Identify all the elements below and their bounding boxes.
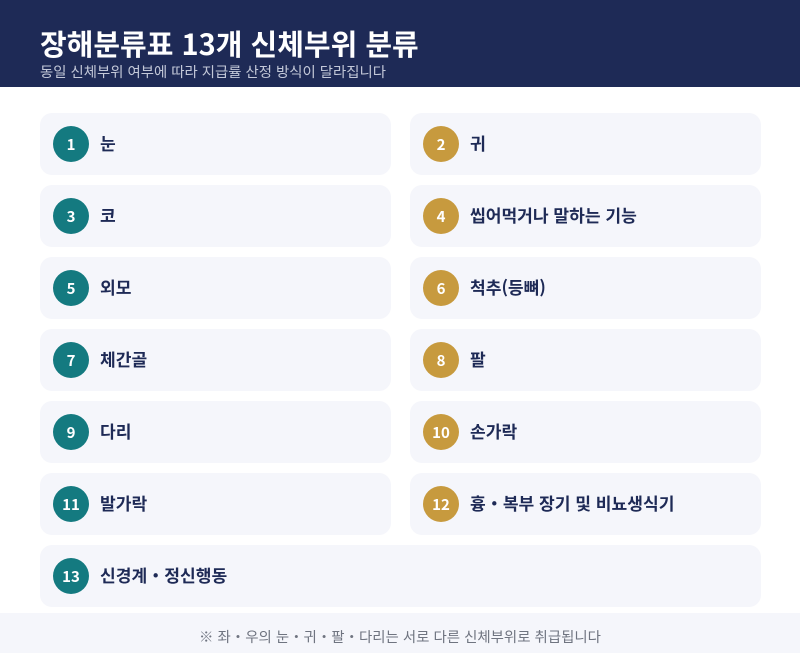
title: 장해분류표 13개 신체부위 분류	[40, 22, 419, 64]
card 3: 코: 3	[67, 206, 75, 227]
card 9: 다리: 다리	[100, 418, 131, 443]
card 12: 흉·복부 장기 및 비뇨생식기	[410, 473, 761, 535]
footer band	[0, 613, 800, 653]
card 2: 귀: 2	[437, 134, 445, 155]
card 1: 눈: 1	[67, 134, 75, 155]
card 5: 외모: 외모	[100, 274, 131, 299]
card 7: 체간골: 7	[67, 350, 75, 371]
card 1: 눈	[40, 113, 391, 175]
card 3: 코: 코	[100, 202, 116, 227]
card 5: 외모: 5	[67, 278, 75, 299]
card 4: 씹어먹거나 말하는 기능: 4	[437, 206, 445, 227]
card 6: 척추(등뼈)	[410, 257, 761, 319]
card 6: 척추(등뼈): 척추(등뼈)	[470, 274, 546, 299]
card 11: 발가락: 발가락	[100, 490, 147, 515]
card 2: 귀: 귀	[470, 130, 486, 155]
card 8: 팔	[410, 329, 761, 391]
card 13: 신경계·정신행동	[40, 545, 761, 607]
card 9: 다리	[40, 401, 391, 463]
subtitle: 동일 신체부위 여부에 따라 지급률 산정 방식이 달라집니다	[40, 61, 386, 82]
card 4: 씹어먹거나 말하는 기능	[410, 185, 761, 247]
card 12: 흉·복부 장기 및 비뇨생식기: 12	[432, 494, 450, 515]
card 13: 신경계·정신행동: 13	[62, 566, 80, 587]
card 9: 다리: 9	[67, 422, 75, 443]
card 8: 팔: 팔	[470, 346, 486, 371]
card 11: 발가락: 11	[62, 494, 80, 515]
card 8: 팔: 8	[437, 350, 445, 371]
card 13: 신경계·정신행동: 신경계・정신행동	[100, 562, 227, 587]
card 2: 귀	[410, 113, 761, 175]
card 7: 체간골	[40, 329, 391, 391]
card 5: 외모	[40, 257, 391, 319]
card 11: 발가락	[40, 473, 391, 535]
card 10: 손가락: 10	[432, 422, 450, 443]
card 12: 흉·복부 장기 및 비뇨생식기: 흉・복부 장기 및 비뇨생식기	[470, 490, 674, 515]
card 10: 손가락	[410, 401, 761, 463]
card 4: 씹어먹거나 말하는 기능: 씹어먹거나 말하는 기능	[470, 202, 637, 227]
card 1: 눈: 눈	[100, 130, 116, 155]
footnote: ※ 좌・우의 눈・귀・팔・다리는 서로 다른 신체부위로 취급됩니다	[199, 626, 601, 647]
card 7: 체간골: 체간골	[100, 346, 147, 371]
card 3: 코	[40, 185, 391, 247]
header band	[0, 0, 800, 87]
card 6: 척추(등뼈): 6	[437, 278, 445, 299]
card 10: 손가락: 손가락	[470, 418, 517, 443]
